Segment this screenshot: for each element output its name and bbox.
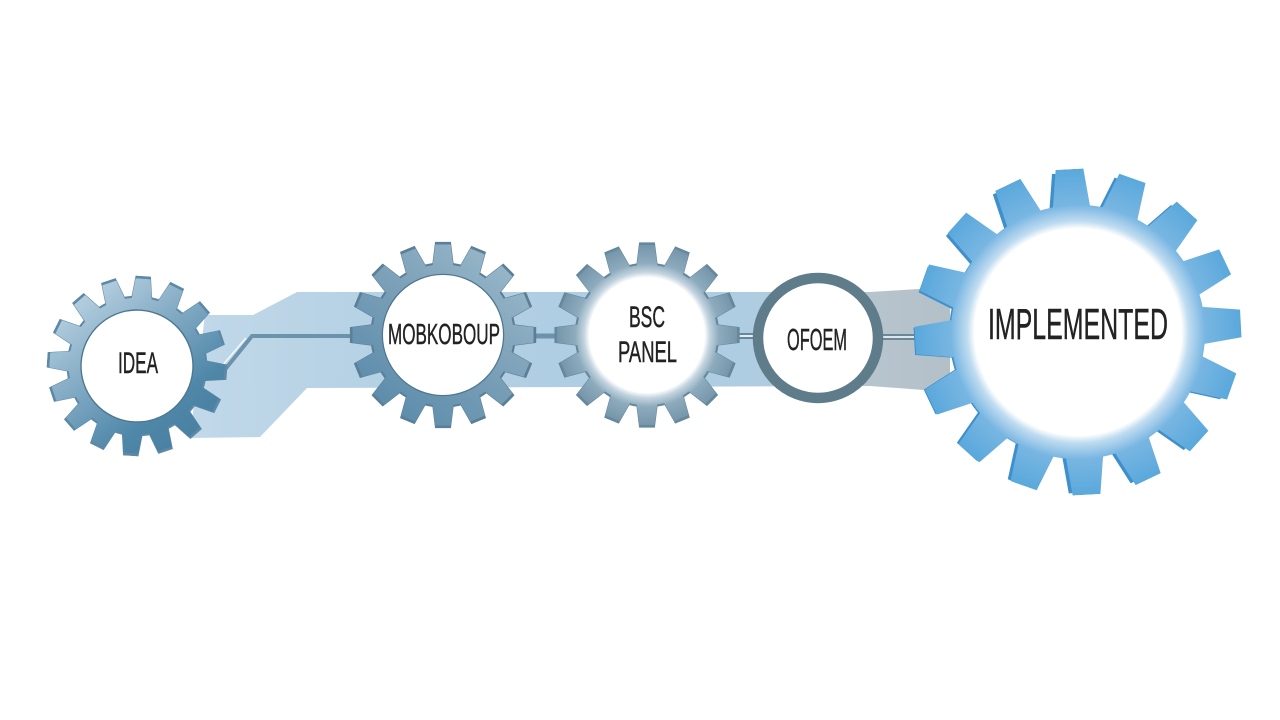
connector lines between gears <box>221 336 925 372</box>
gear: Implemented <box>914 168 1242 496</box>
label: Mobkoboup: MOBKOBOUP <box>388 319 500 351</box>
ring: Ofoem <box>758 278 878 398</box>
label: Idea: IDEA <box>118 347 158 380</box>
gear: Idea <box>46 276 228 456</box>
connecting ribbon <box>190 287 950 438</box>
gear: Mobkoboup <box>350 242 536 428</box>
label: BSC: BSC <box>629 301 665 334</box>
gear: BSC Panel <box>554 242 740 428</box>
label: Ofoem: OFOEM <box>787 322 847 357</box>
label: Panel: PANEL <box>618 336 677 369</box>
